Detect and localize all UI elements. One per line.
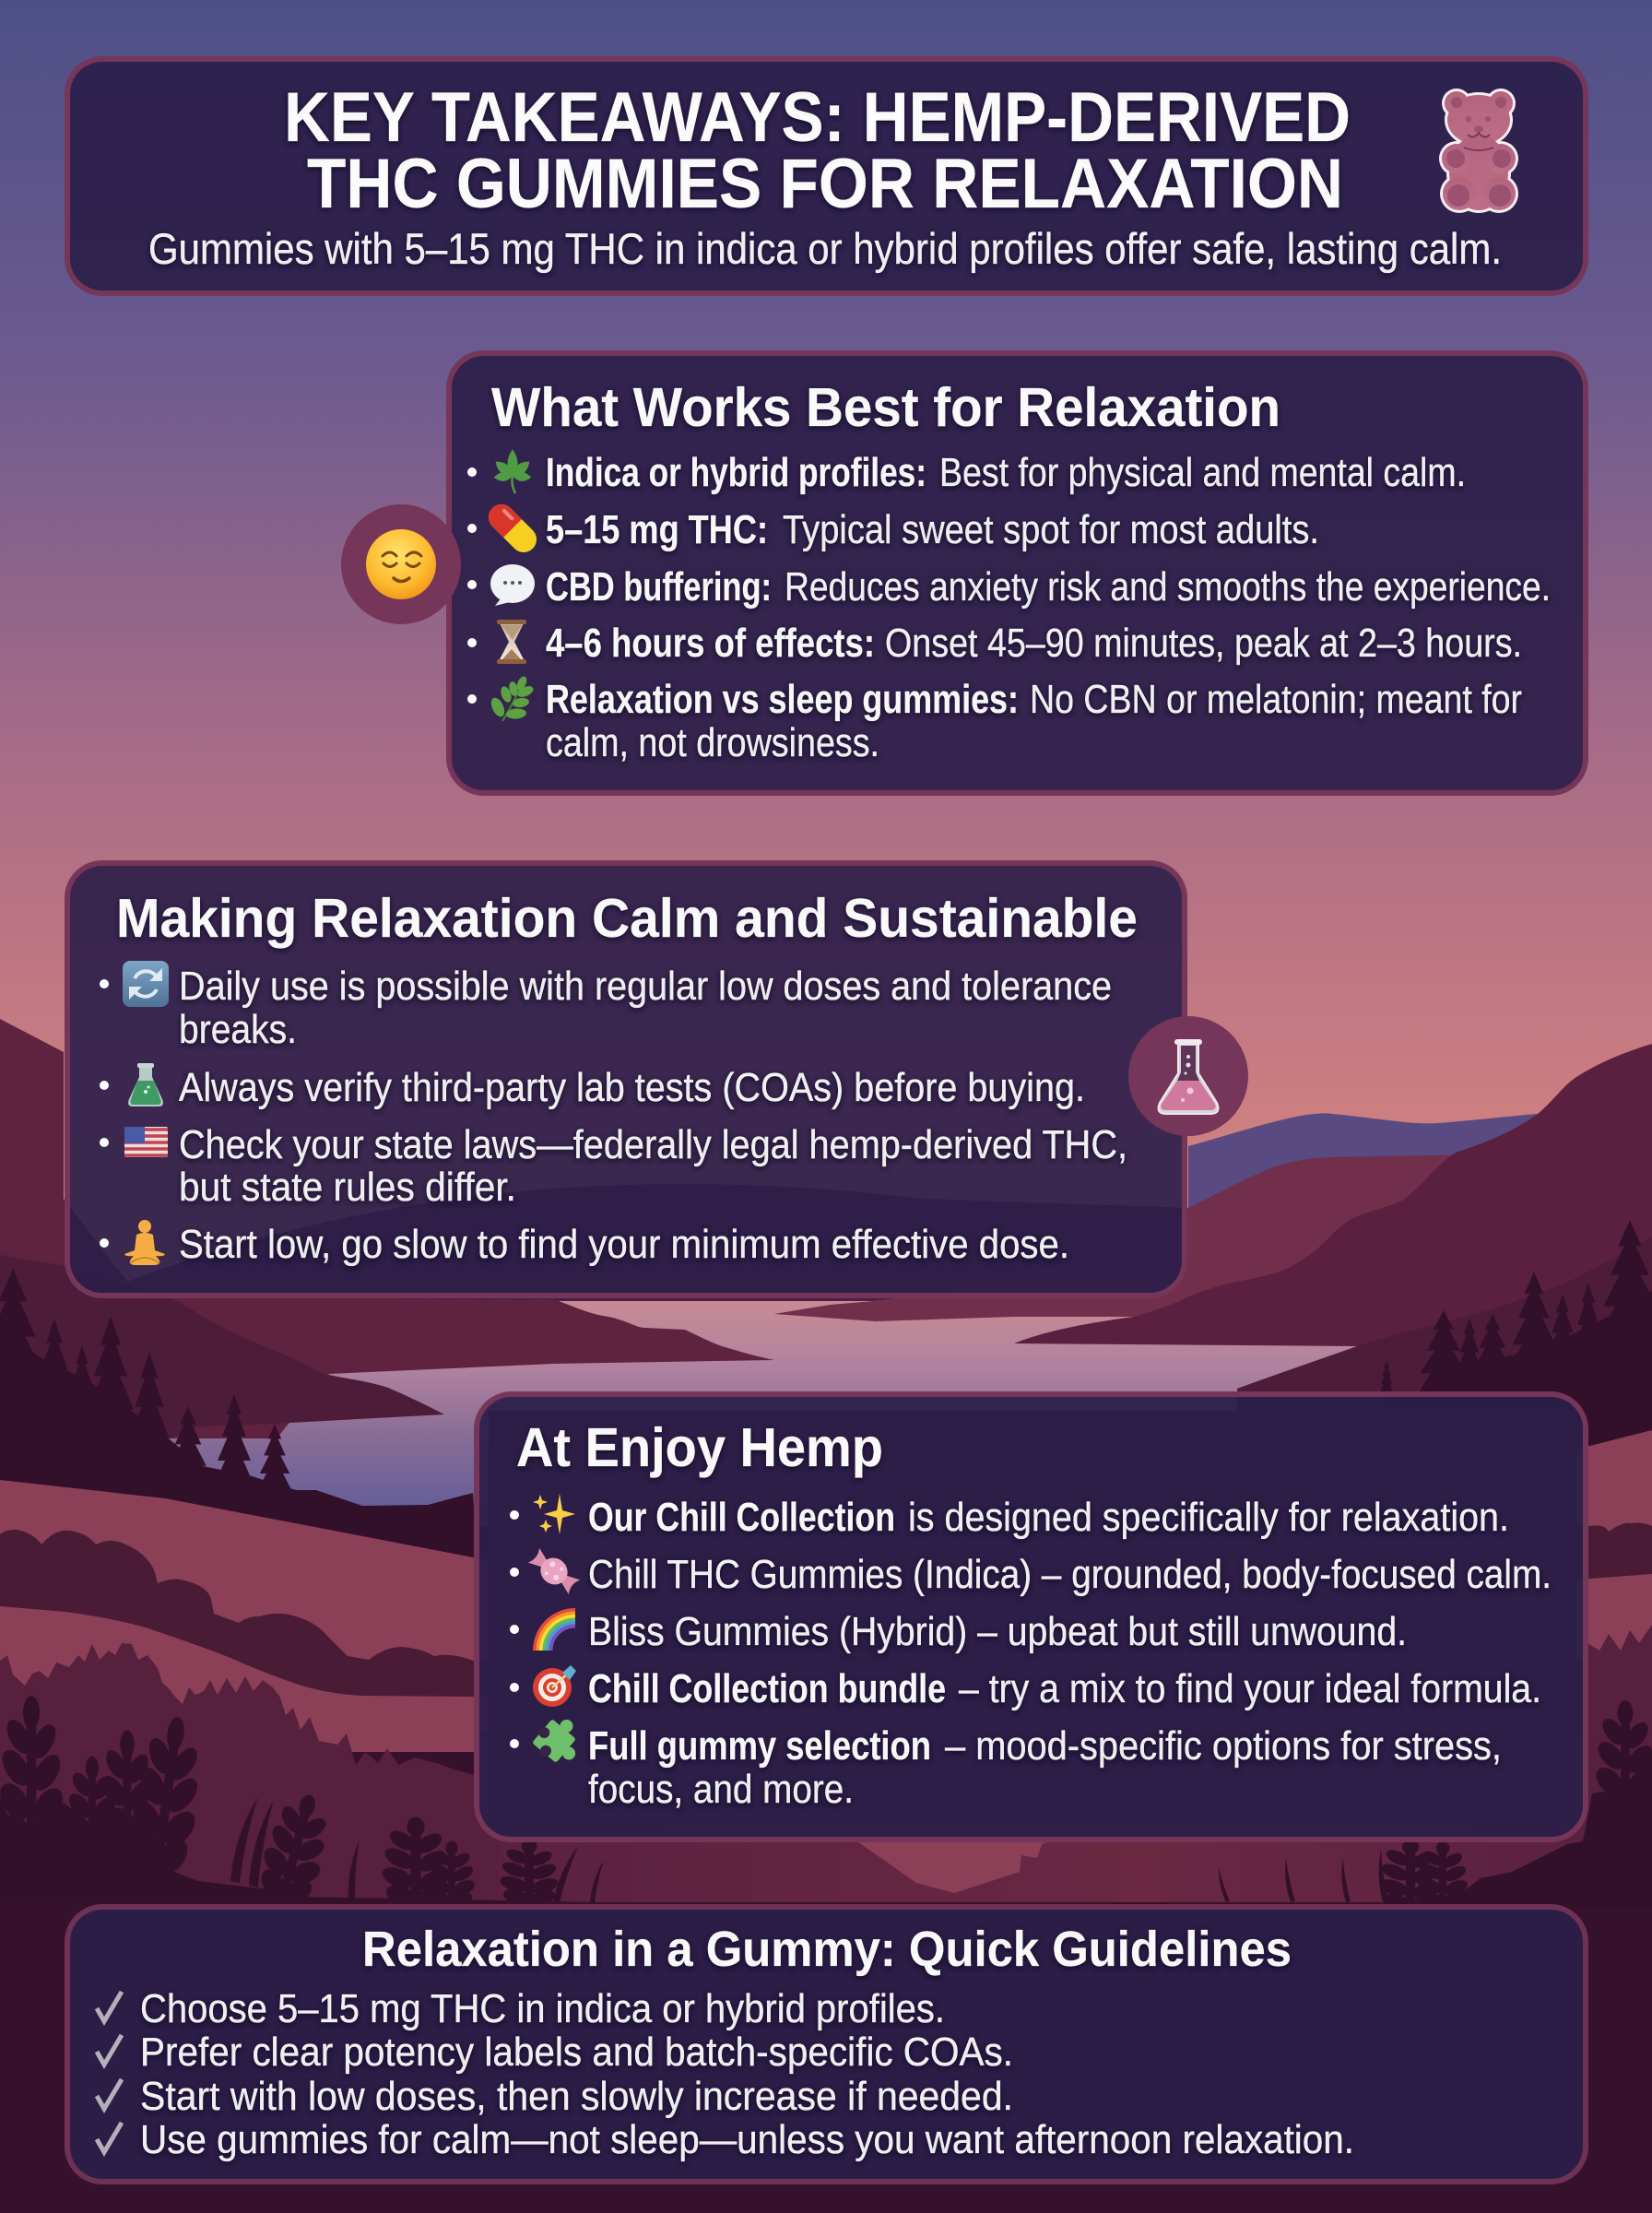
title	[284, 78, 1351, 223]
title: THC GUMMIES FOR RELAXATION	[307, 145, 1343, 223]
icon: meditating person	[124, 1220, 165, 1265]
badge: relaxed face	[341, 504, 461, 624]
icon: refresh arrows	[123, 961, 169, 1007]
heading: What Works Best for Relaxation	[491, 377, 1280, 438]
icon: candy	[525, 1545, 583, 1597]
item: bundle	[510, 1665, 1541, 1711]
panel: making relaxation calm and sustainable	[67, 863, 1185, 1296]
heading: Relaxation in a Gummy: Quick Guidelines	[362, 1922, 1292, 1977]
icon: pill	[483, 499, 542, 558]
item: relaxation vs sleep: calm, not drowsiness.	[546, 720, 879, 765]
heading: At Enjoy Hemp	[516, 1417, 883, 1478]
icon: sparkles	[533, 1494, 575, 1534]
list: what works	[467, 449, 1551, 765]
icon: gummy bear	[1439, 89, 1518, 213]
subtitle: Gummies with 5–15 mg THC in indica or hybrid profiles offer safe, lasting calm.	[148, 224, 1502, 273]
item: state laws	[100, 1122, 1127, 1210]
item: relaxation vs sleep: No CBN or melatonin; meant for	[1030, 677, 1522, 722]
item: relaxation vs sleep: Relaxation vs sleep gummies:	[546, 677, 1019, 722]
item: thc dose: Typical sweet spot for most adults.	[783, 507, 1319, 552]
item: thc dose: 5–15 mg THC:	[546, 507, 768, 552]
checklist	[97, 1986, 1354, 2162]
badge: flask	[1128, 1016, 1248, 1136]
item: daily use: Daily use is possible with regular low doses and tolerance	[179, 964, 1112, 1009]
item: indica or hybrid: Best for physical and mental calm.	[939, 450, 1466, 495]
item: hours of effects	[467, 620, 1522, 666]
background: sunset sky	[0, 0, 1652, 1383]
list: products	[510, 1494, 1552, 1812]
item: indica or hybrid: Indica or hybrid profiles:	[546, 450, 926, 495]
item: choose dose: Choose 5–15 mg THC in indica or hybrid profiles.	[140, 1986, 945, 2031]
panel: what works best for relaxation	[449, 353, 1586, 793]
panel: quick guidelines	[67, 1907, 1586, 2182]
panel: title header	[67, 59, 1586, 293]
panel: at enjoy hemp	[477, 1394, 1586, 1840]
icon: target	[533, 1665, 576, 1707]
item: state laws: Check your state laws—federally legal hemp-derived THC,	[179, 1122, 1127, 1167]
icon: us flag	[124, 1127, 168, 1157]
item: start low: Start with low doses, then slowly increase if needed.	[140, 2074, 1013, 2119]
icon: green leaf	[492, 449, 533, 493]
item: hours of effects: Onset 45–90 minutes, peak at 2–3 hours.	[885, 621, 1522, 666]
icon: hourglass	[497, 620, 526, 664]
item: full selection: – mood-specific options for stress,	[945, 1723, 1502, 1769]
item: full selection: Full gummy selection	[588, 1723, 931, 1769]
background: mountain landscape	[0, 1019, 1652, 2213]
title: KEY TAKEAWAYS: HEMP-DERIVED	[284, 78, 1351, 157]
item: bliss gummies: Bliss Gummies (Hybrid) – upbeat but still unwound.	[588, 1609, 1407, 1654]
icon: puzzle piece	[528, 1710, 590, 1771]
item: calm not sleep: Use gummies for calm—not sleep—unless you want afternoon relaxation.	[140, 2117, 1354, 2162]
item: indica or hybrid	[467, 449, 1466, 495]
list: sustainable use	[100, 961, 1127, 1267]
item: start low: Start low, go slow to find your minimum effective dose.	[179, 1222, 1069, 1267]
item: lab tests: Always verify third-party lab tests (COAs) before buying.	[179, 1065, 1085, 1110]
item: thc dose	[467, 499, 1319, 558]
item: chill thc gummies: Chill THC Gummies (Indica) – grounded, body-focused calm.	[588, 1552, 1552, 1597]
icon: herb	[489, 675, 535, 721]
icon: rainbow	[535, 1610, 575, 1651]
item: chill collection: Our Chill Collection	[588, 1495, 895, 1540]
item: full selection: focus, and more.	[588, 1767, 854, 1812]
item: chill collection: is designed specifically for relaxation.	[908, 1495, 1509, 1540]
item: chill collection	[510, 1494, 1509, 1540]
heading: Making Relaxation Calm and Sustainable	[116, 888, 1138, 949]
item: bundle: Chill Collection bundle	[588, 1666, 946, 1711]
item: cbd buffering	[467, 564, 1551, 609]
icon: test flask	[128, 1063, 163, 1106]
item: full selection	[510, 1710, 1502, 1812]
icon: speech bubble	[490, 564, 535, 606]
item: relaxation vs sleep	[467, 675, 1522, 765]
item: clear labels: Prefer clear potency labels and batch-specific COAs.	[140, 2030, 1013, 2075]
item: state laws: but state rules differ.	[179, 1165, 516, 1210]
item: daily use: breaks.	[179, 1007, 297, 1052]
item: cbd buffering: CBD buffering:	[546, 564, 772, 609]
item: daily use	[100, 961, 1112, 1052]
item: bundle: – try a mix to find your ideal formula.	[959, 1666, 1541, 1711]
item: hours of effects: 4–6 hours of effects:	[546, 621, 875, 666]
